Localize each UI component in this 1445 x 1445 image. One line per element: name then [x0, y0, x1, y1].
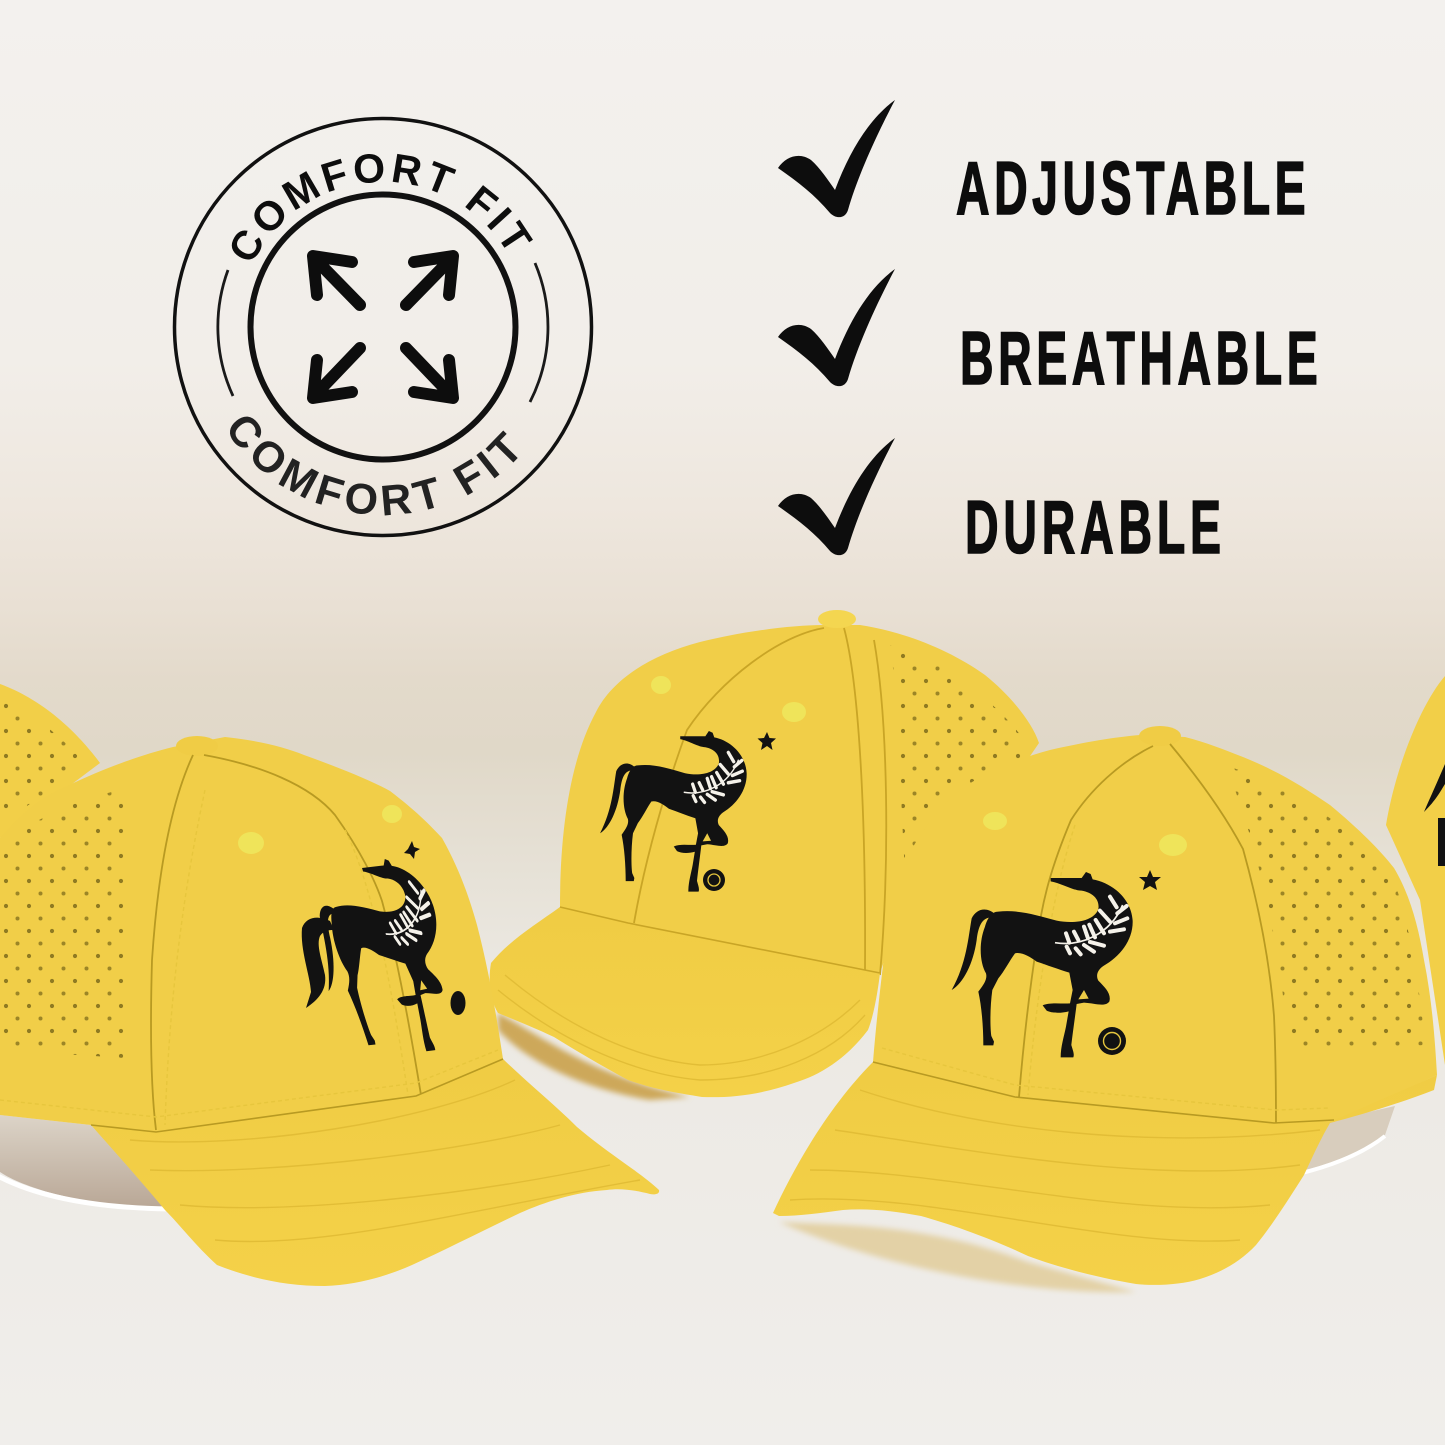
button: [176, 736, 218, 756]
maker mark: [450, 991, 466, 1015]
right cap: [773, 726, 1437, 1292]
horse logo: [952, 872, 1133, 1057]
crown: [0, 737, 503, 1133]
star: [758, 732, 776, 750]
left side arc: [218, 270, 233, 396]
maker mark: [703, 869, 725, 891]
star: [404, 841, 420, 859]
label: durable: DURABLE: [965, 487, 1221, 570]
brim: [91, 1059, 659, 1286]
horse tail: [302, 918, 334, 1008]
stand right: [1298, 1106, 1395, 1174]
brim stitching: [130, 1080, 640, 1242]
badge: comfort fit: [172, 116, 594, 538]
left cap: [0, 736, 659, 1286]
stitching: [882, 825, 1330, 1110]
button: [1139, 726, 1181, 746]
stitching: [0, 790, 498, 1125]
badge text: bottom: COMFORT FIT: [230, 416, 518, 516]
feature list: [778, 100, 1318, 570]
brim stitching: [790, 1090, 1320, 1241]
seams: [151, 755, 421, 1130]
outer ring: [174, 118, 592, 536]
seams: [634, 628, 886, 975]
shadow under brim: [779, 1222, 1136, 1292]
perforation panel: [0, 788, 130, 1058]
brim stitching: [498, 975, 865, 1080]
crown: [560, 625, 1039, 973]
eyelets: [782, 702, 806, 722]
brim: [490, 907, 880, 1097]
brim: [773, 1062, 1437, 1285]
middle cap: [490, 610, 1039, 1100]
eyelets: [983, 812, 1007, 830]
button: [818, 610, 856, 628]
maker mark: [1098, 1027, 1126, 1055]
icon: check 3: [778, 438, 895, 555]
crown: [873, 735, 1437, 1125]
brim shadow: [498, 1013, 690, 1100]
inner ring: [250, 194, 516, 460]
stand and shadow left: [0, 1115, 170, 1209]
icon: check 2: [778, 269, 895, 386]
eyelets: [238, 832, 264, 854]
horse logo: [291, 855, 477, 1060]
perforation panel: [1225, 765, 1425, 1052]
far right cap: [1386, 676, 1445, 1065]
label: adjustable: ADJUSTABLE: [956, 148, 1306, 231]
icon: check 1: [778, 100, 895, 217]
label: breathable: BREATHABLE: [960, 318, 1318, 401]
perforation panel: [890, 645, 1030, 870]
star: [1139, 870, 1161, 890]
horse logo: [600, 731, 747, 892]
seams: [1019, 744, 1276, 1123]
icon: four outward arrows: [313, 256, 453, 398]
far left cap: [0, 684, 100, 838]
right side arc: [530, 263, 548, 402]
badge text: top: COMFORT FIT: [232, 154, 533, 260]
